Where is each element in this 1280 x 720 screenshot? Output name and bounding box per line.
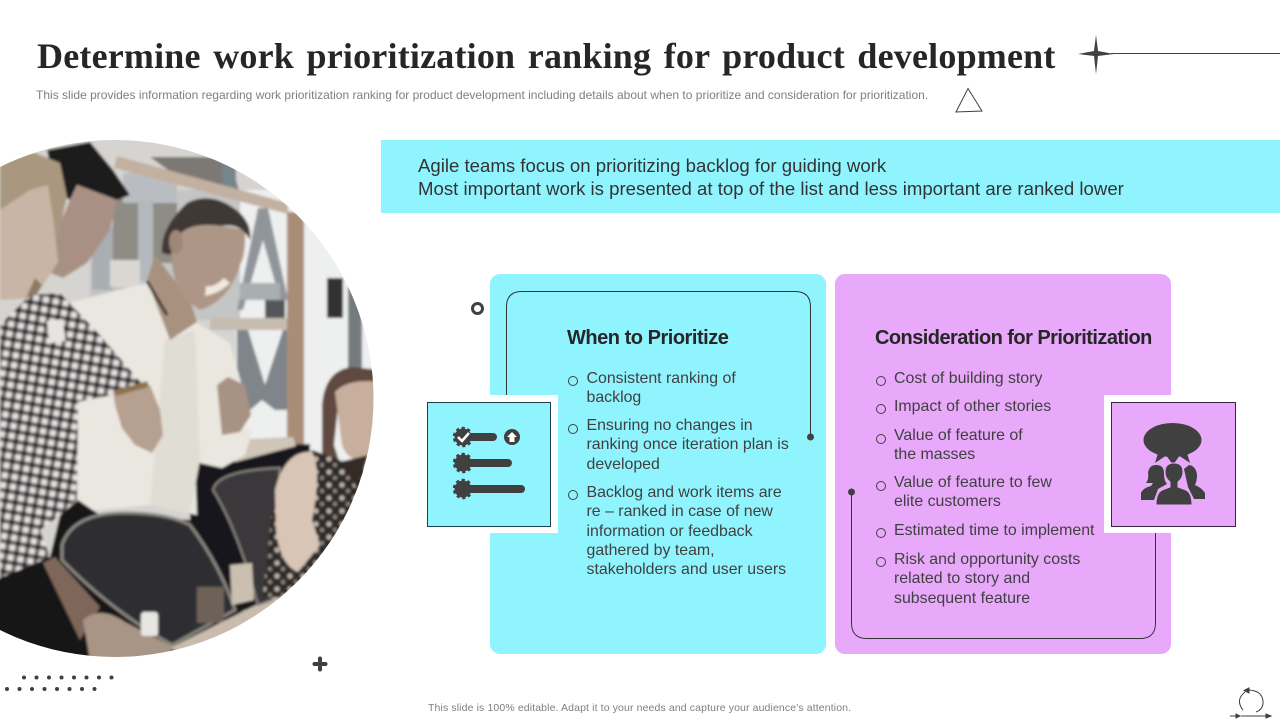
woman at right bbox=[320, 366, 373, 462]
dark floor area bbox=[190, 444, 310, 610]
woman at left bbox=[0, 152, 67, 240]
bullet list bbox=[568, 370, 789, 578]
panel: when to prioritize bbox=[490, 274, 826, 654]
decoration: dots bbox=[5, 676, 114, 691]
connector frame bbox=[506, 291, 814, 440]
bullet list bbox=[876, 370, 1094, 607]
backdrop bbox=[0, 140, 366, 581]
decoration: plus bbox=[312, 656, 328, 672]
lower dark region and chair bbox=[0, 500, 245, 670]
bullet list: stakeholders and user users bbox=[586, 561, 786, 578]
banner text bbox=[418, 155, 1124, 199]
bullet list: ranking once iteration plan is bbox=[586, 436, 789, 453]
bullet list: Consistent ranking of bbox=[586, 370, 736, 387]
bullet list: Estimated time to implement bbox=[894, 522, 1094, 539]
icon: prioritized checklist bbox=[420, 395, 558, 533]
subtitle: This slide provides information regarding work prioritization ranking for product development including details about when to prioritize and consideration for prioritization. bbox=[36, 88, 928, 102]
photo: team around a table in circular crop bbox=[0, 140, 374, 657]
bullet list: information or feedback bbox=[586, 523, 753, 540]
banner text: Agile teams focus on prioritizing backlog for guiding work bbox=[418, 155, 886, 176]
bullet list: Value of feature to few bbox=[894, 474, 1052, 491]
bullet list: the masses bbox=[894, 446, 975, 463]
man behind at left bbox=[47, 142, 130, 200]
icon: loop arrow bbox=[1230, 687, 1272, 719]
heading: When to Prioritize bbox=[567, 327, 728, 349]
decoration: star with line bbox=[1078, 35, 1280, 74]
banner bbox=[381, 140, 1280, 213]
bullet list: Impact of other stories bbox=[894, 398, 1051, 415]
bullet list: Value of feature of bbox=[894, 427, 1023, 444]
heading: Consideration for Prioritization bbox=[875, 327, 1152, 349]
connector frame bbox=[848, 488, 1156, 639]
checked shirt bbox=[0, 293, 143, 578]
bullet list: re – ranked in case of new bbox=[586, 503, 773, 520]
bullet list: elite customers bbox=[894, 493, 1001, 510]
banner text: Most important work is presented at top of the list and less important are ranked lower bbox=[418, 178, 1124, 199]
bullet list: gathered by team, bbox=[586, 542, 715, 559]
raised hand bbox=[113, 385, 163, 453]
bullet list: backlog bbox=[586, 389, 641, 406]
decoration: small ring bbox=[471, 302, 484, 315]
bullet list: Risk and opportunity costs bbox=[894, 551, 1080, 568]
bullet list: related to story and bbox=[894, 570, 1030, 587]
title: Determine work prioritization ranking for product development bbox=[37, 36, 1056, 76]
bullet list: subsequent feature bbox=[894, 590, 1030, 607]
footer note: This slide is 100% editable. Adapt it to your needs and capture your audience's attention. bbox=[428, 702, 851, 714]
panel: consideration for prioritization bbox=[835, 274, 1171, 654]
bullet list: Backlog and work items are bbox=[586, 484, 782, 501]
man in white shirt bbox=[68, 283, 253, 515]
icon: people with speech bubble bbox=[1104, 395, 1244, 533]
second chair bbox=[213, 468, 280, 605]
bullet list: Cost of building story bbox=[894, 370, 1042, 387]
bullet list: developed bbox=[586, 456, 660, 473]
bullet list: Ensuring no changes in bbox=[586, 417, 753, 434]
decoration: triangle bbox=[955, 88, 983, 112]
